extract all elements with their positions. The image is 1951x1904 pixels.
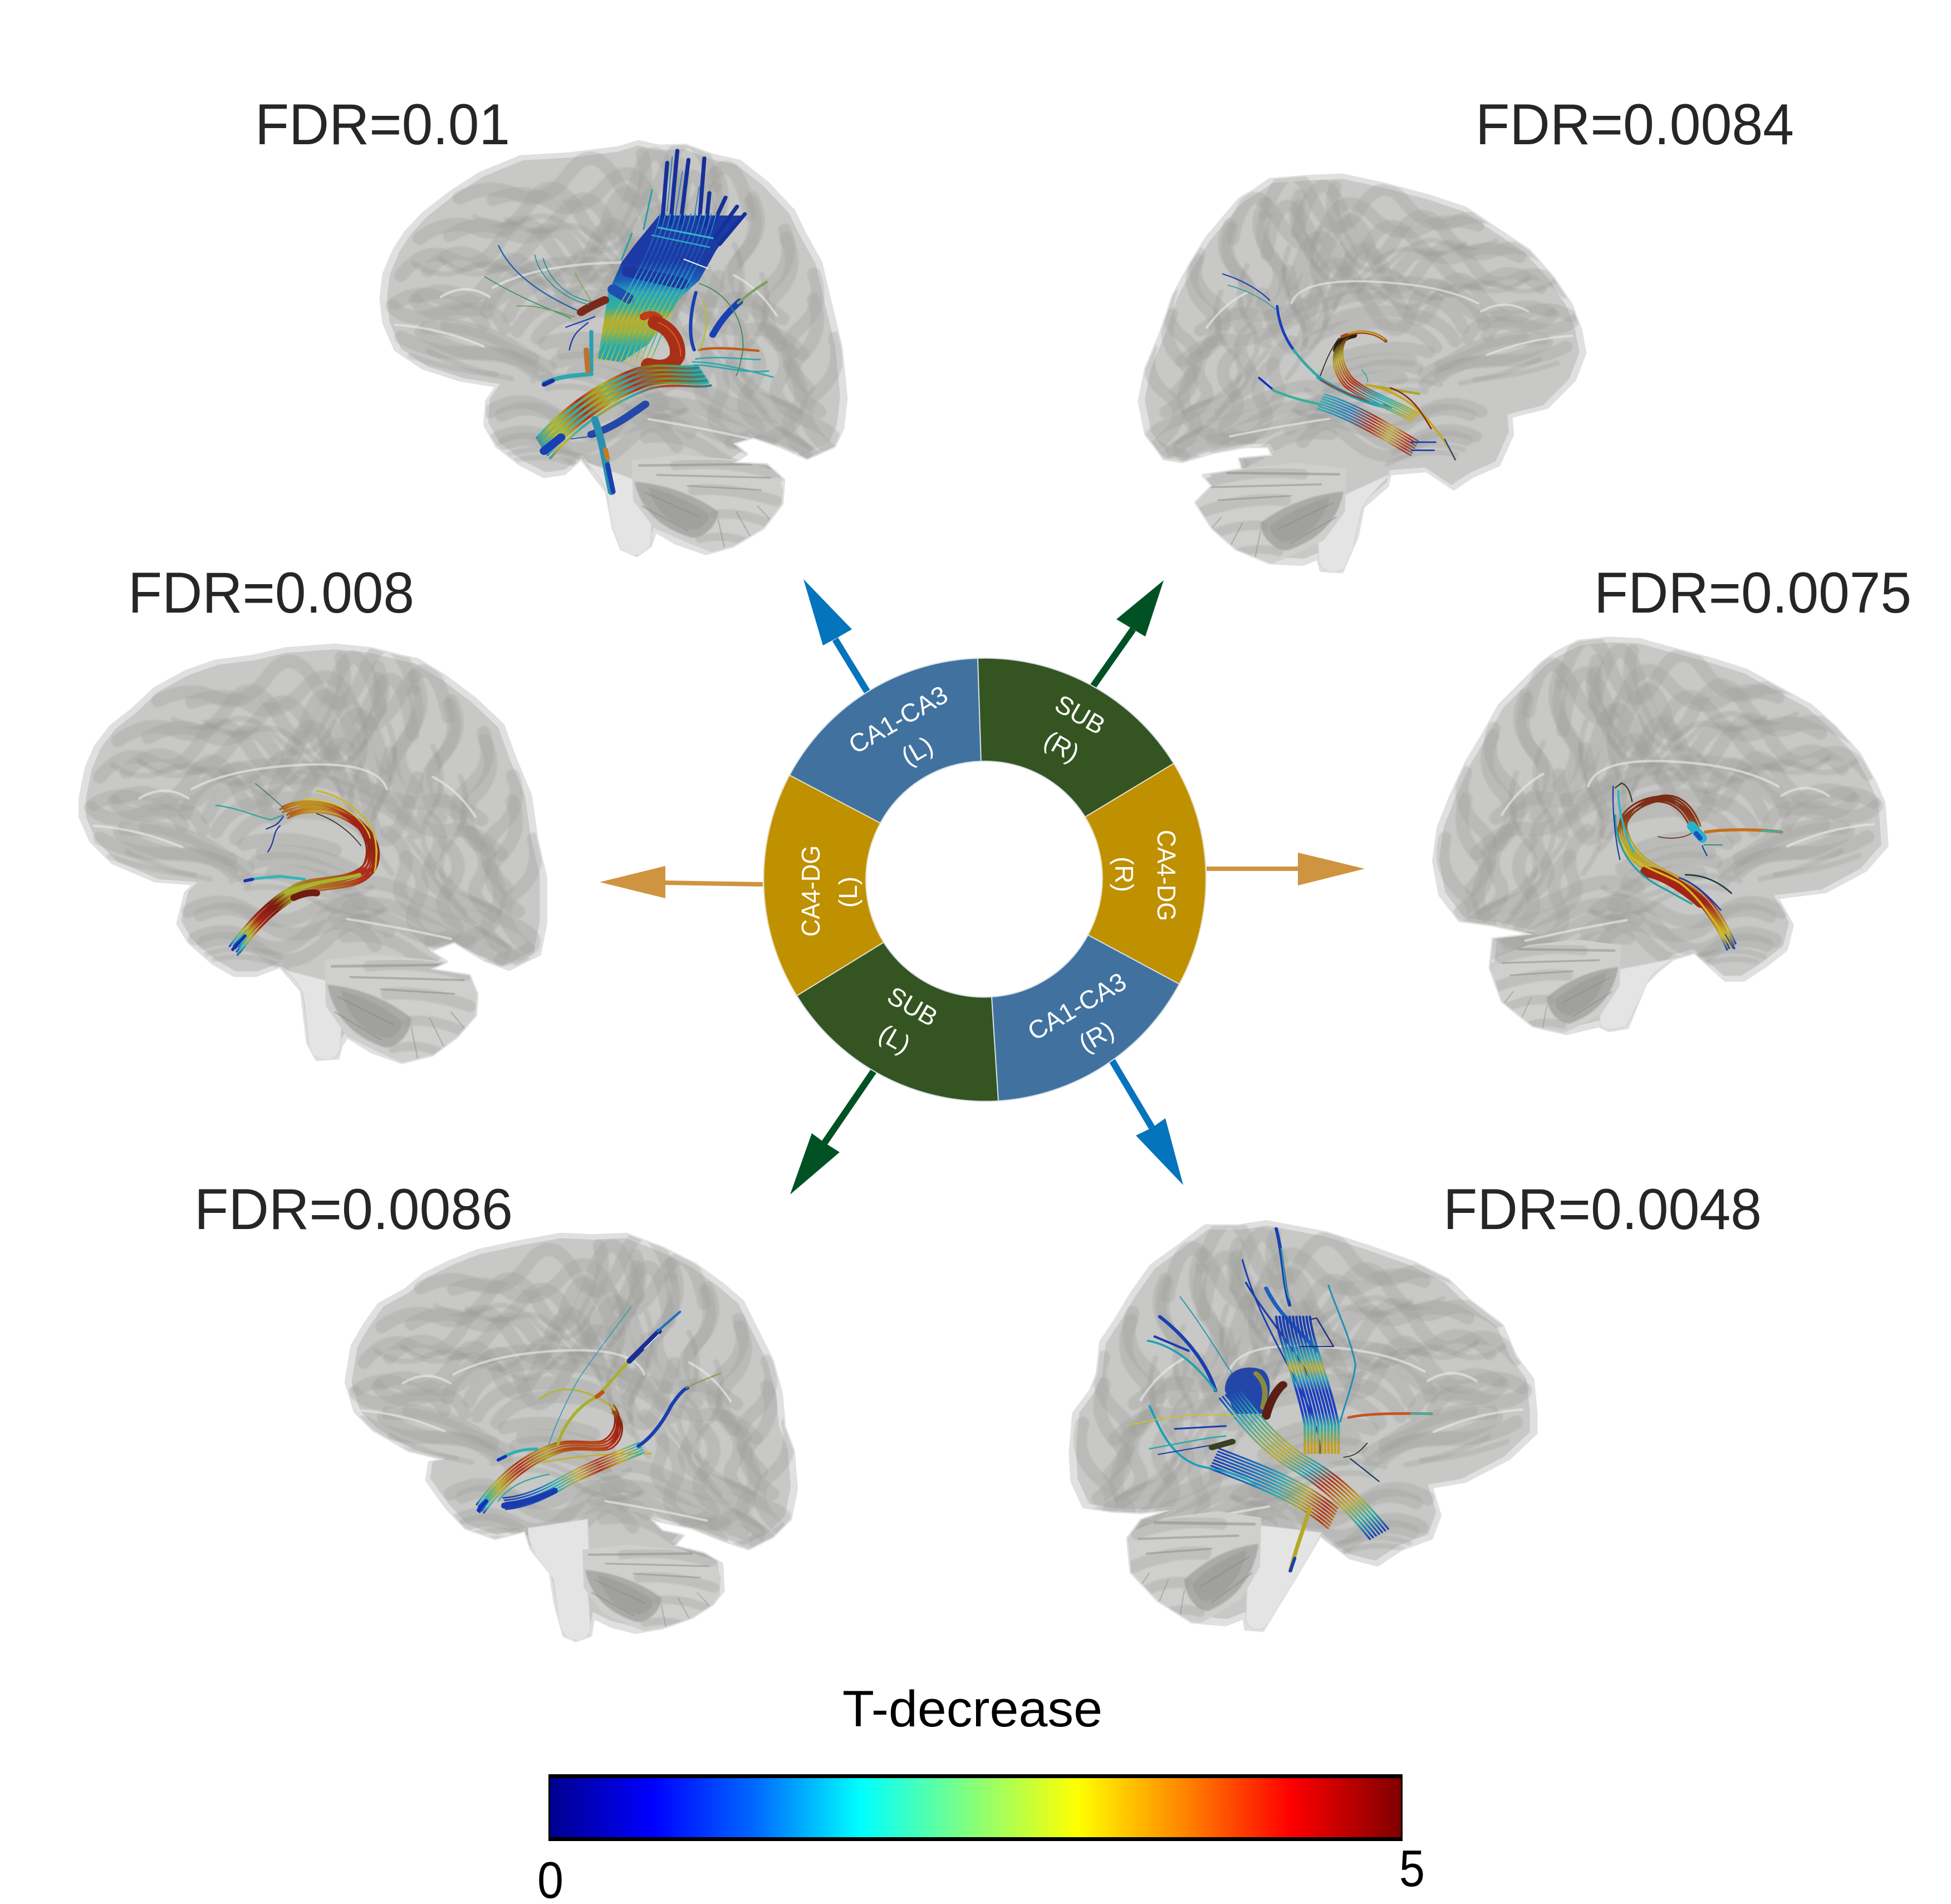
segment: CA1-CA3 L: (L) (896, 731, 938, 771)
brain: top-left, FDR=0.01, CA1-CA3 L tracts (381, 136, 873, 556)
segment: CA1-CA3 R: CA1-CA3 (1023, 967, 1131, 1046)
segment: CA4-DG R: CA4-DG (1152, 830, 1181, 921)
heading: FDR=0.0086: FDR=0.0086 (194, 1177, 513, 1242)
fibre tracts (485, 150, 773, 492)
segment: CA1-CA3 R (992, 935, 1179, 1101)
brain silhouette (381, 141, 846, 556)
segment: CA4-DG L: CA4-DG (796, 845, 825, 937)
brain silhouette (1139, 175, 1585, 572)
heading: FDR=0.0048: FDR=0.0048 (1443, 1177, 1762, 1242)
segment: CA1-CA3 L: CA1-CA3 (844, 680, 953, 760)
heading: FDR=0.008: FDR=0.008 (128, 561, 414, 625)
heading: FDR=0.0084: FDR=0.0084 (1475, 92, 1794, 157)
colour bar (548, 1774, 1403, 1841)
segment: CA1-CA3 L (790, 658, 981, 823)
segment: CA4-DG L (764, 775, 884, 996)
arrow: blue to bottom-right brain (1112, 1060, 1183, 1185)
fibre tracts (1130, 1228, 1432, 1571)
fibre tracts (1613, 783, 1782, 949)
arrow: orange to left brain (600, 866, 763, 898)
brain: left, FDR=0.008, CA4-DG L tracts (80, 640, 572, 1064)
segment: CA4-DG R (1085, 763, 1206, 984)
segment: CA1-CA3 R: (R) (1073, 1015, 1119, 1058)
segment: SUB L: (L) (874, 1019, 915, 1059)
brain: right, FDR=0.0075, CA4-DG R tracts (1408, 633, 1887, 1039)
brain: top-right, FDR=0.0084, SUB R tracts (1115, 170, 1585, 572)
cortex folds (1045, 1216, 1530, 1630)
brain: bottom-right, FDR=0.0048, CA1-CA3 R tracts (1045, 1216, 1536, 1631)
brain: bottom-left, FDR=0.0086, SUB L tracts (346, 1228, 825, 1641)
arrow: blue to top-left brain (803, 579, 870, 697)
brain silhouette (80, 645, 546, 1063)
arrow: green to bottom-left brain (790, 1070, 874, 1195)
segment: SUB R: (R) (1039, 725, 1085, 768)
arrow: orange to right brain (1207, 853, 1365, 885)
colour bar max label: 5 (1399, 1839, 1425, 1897)
fibre tracts (1223, 274, 1455, 459)
cortex folds (387, 136, 873, 555)
heading: FDR=0.01: FDR=0.01 (255, 92, 510, 157)
brain silhouette (346, 1234, 796, 1641)
segment: SUB L: SUB (883, 981, 943, 1032)
segment: CA4-DG R: (R) (1110, 856, 1139, 892)
segment: SUB R: SUB (1050, 689, 1110, 740)
segment: SUB R (978, 658, 1174, 817)
fibre tracts (477, 1307, 720, 1513)
arrow: green to top-right brain (1090, 580, 1164, 691)
colour bar title: T-decrease (842, 1681, 1102, 1737)
ring chart: hippocampal subfields (764, 658, 1206, 1102)
cortex folds (1408, 633, 1881, 1039)
cortex folds (1115, 170, 1580, 572)
cortex folds (86, 640, 572, 1064)
cortex folds (351, 1228, 825, 1640)
heading: FDR=0.0075: FDR=0.0075 (1594, 561, 1911, 625)
brain silhouette (1070, 1221, 1536, 1631)
fibre tracts (216, 784, 379, 955)
brain silhouette (1434, 638, 1887, 1034)
segment: SUB L (797, 942, 998, 1102)
segment: CA4-DG L: (L) (834, 877, 862, 908)
